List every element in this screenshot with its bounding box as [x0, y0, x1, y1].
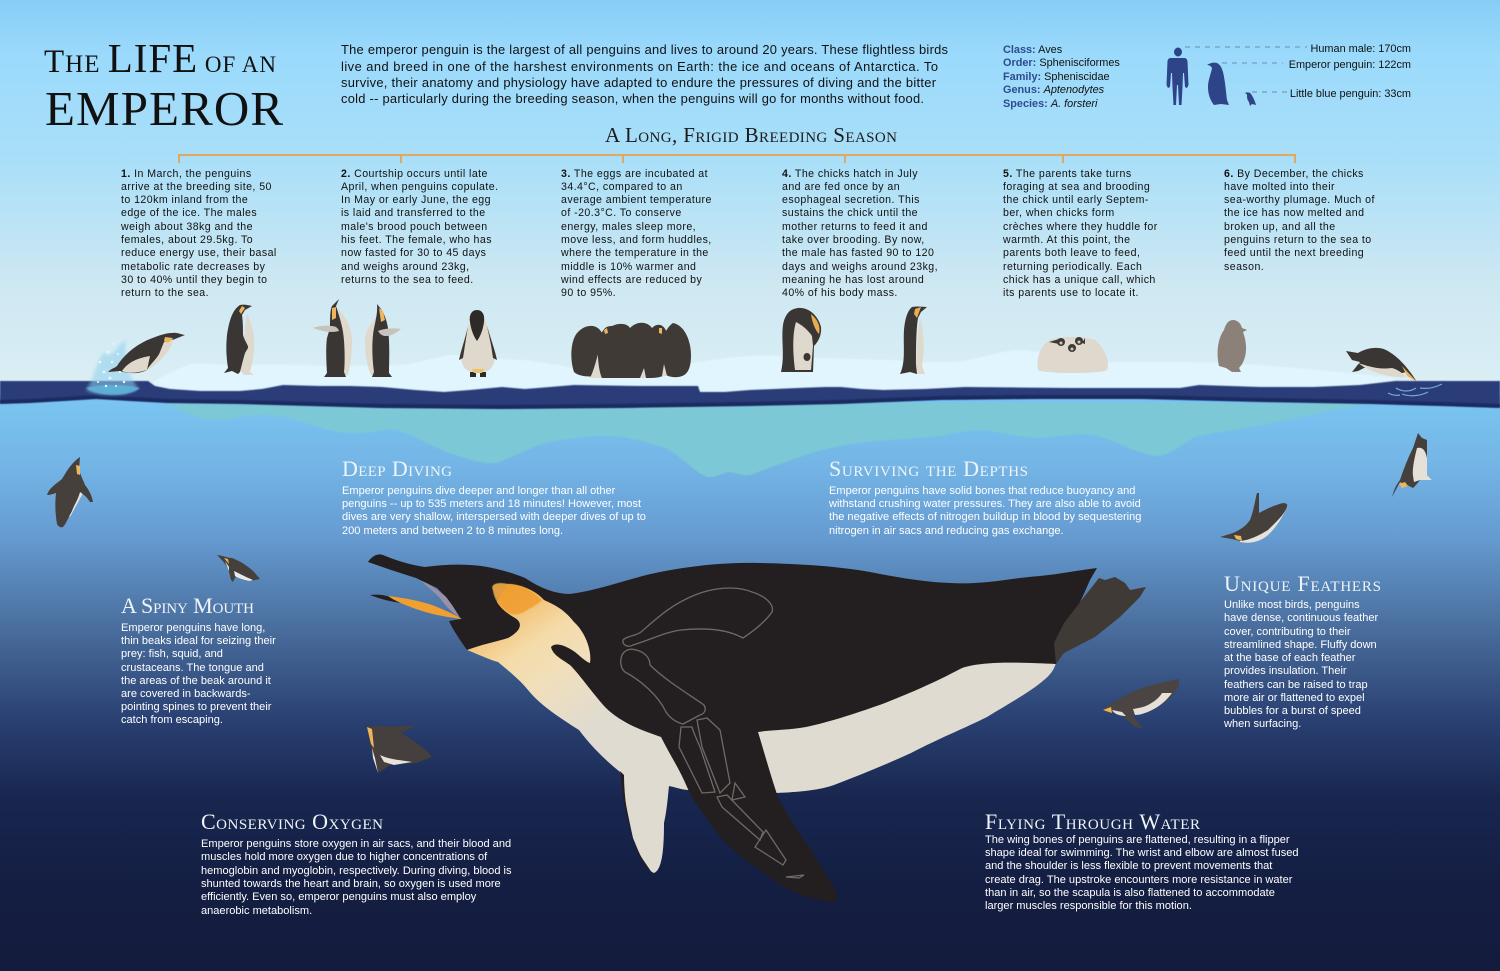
step 4: the male has fasted 90 to 120 [782, 247, 934, 259]
penguin huddle [571, 323, 691, 378]
text: flying through water: and the shoulder is less flexible to prevent movements that [985, 860, 1272, 872]
text: unique feathers: Unlike most birds, penguins [1224, 599, 1360, 611]
intro paragraph: survive, their anatomy and physiology have adapted to endure the pressures of diving and the bitter [341, 75, 937, 90]
text: surviving the depths: withstand crushing water pressures. They are also able to avoid [828, 498, 1141, 510]
step 5: crèches where they huddle for [1003, 221, 1158, 233]
step 1 [120, 168, 277, 299]
step 2: returns to the sea to feed. [341, 274, 474, 286]
intro paragraph: The emperor penguin is the largest of all penguins and lives to around 20 years. These flightless birds [341, 42, 948, 57]
step 4: mother returns to feed it and [782, 221, 928, 233]
text: unique feathers: bubbles for a burst of speed [1224, 705, 1361, 717]
step 6: broken up, and all the [1224, 221, 1336, 233]
step 6: sea-worthy plumage. Much of [1224, 194, 1375, 206]
step 1: return to the sea. [121, 287, 209, 299]
step 2: In May or early June, the egg [341, 194, 491, 206]
step 1: reduce energy use, their basal [121, 247, 277, 259]
step 1: 1. In March, the penguins [121, 168, 252, 180]
text: surviving the depths: nitrogen in air sacs and reducing gas exchange. [829, 525, 1064, 537]
text: conserving oxygen: muscles hold more oxygen due to higher concentrations of [201, 851, 488, 863]
text: deep diving: penguins -- up to 535 meters and 18 minutes! However, most [342, 498, 641, 510]
swimming penguin D [1103, 679, 1179, 728]
text: flying through water: larger muscles responsible for this motion. [985, 900, 1192, 912]
text: a spiny mouth: catch from escaping. [121, 714, 223, 726]
heading: unique feathers: Unique Feathers [1224, 571, 1381, 596]
text: surviving the depths: Emperor penguins have solid bones that reduce buoyancy and [829, 485, 1135, 497]
icon: human silhouette [1166, 48, 1188, 105]
text: unique feathers: streamlined shape. Fluffy down [1224, 639, 1377, 651]
text: conserving oxygen: shunted towards the heart and brain, so oxygen is used more [201, 878, 501, 890]
step 5: warmth. At this point, the [1002, 234, 1130, 246]
swimming penguin B [217, 555, 260, 582]
step 4: and are fed once by an [782, 181, 900, 193]
step 1: to 120km inland from the [121, 194, 248, 206]
text: deep diving [342, 485, 646, 537]
lower beak [370, 595, 462, 619]
step 4: 4. The chicks hatch in July [782, 168, 918, 180]
step 3 [560, 168, 712, 299]
text: unique feathers: have dense, continuous feather [1224, 612, 1378, 624]
step 6: the ice has now melted and [1224, 207, 1364, 219]
step 4: days and weighs around 23kg, [782, 261, 938, 273]
step 4: meaning he has lost around [782, 274, 924, 286]
penguins 3: courting pair [313, 299, 401, 377]
step 3: 90 to 95%. [561, 287, 616, 299]
text: flying through water: than in air, so the scapula is also flattened to accommodate [985, 887, 1275, 899]
text: a spiny mouth: Emperor penguins have long, [121, 622, 265, 634]
step 6: season. [1224, 261, 1264, 273]
step 1: 30 to 40% until they begin to [121, 274, 267, 286]
size comparison chart [1166, 43, 1411, 106]
text: unique feathers: when surfacing. [1223, 718, 1301, 730]
taxonomy list: Family: Spheniscidae [1003, 71, 1110, 83]
orange cheek patch [492, 583, 542, 614]
taxonomy list: Class: Aves [1003, 44, 1063, 56]
text: flying through water: shape ideal for swimming. The wrist and elbow are almost fused [985, 847, 1299, 859]
text: a spiny mouth: prey: fish, squid, and [121, 648, 223, 660]
text: conserving oxygen: efficiently. Even so, emperor penguins must also employ [201, 891, 477, 903]
step 5: chick has a unique call, which [1003, 274, 1156, 286]
tongue [421, 581, 460, 618]
background ocean [0, 395, 1500, 971]
step 1: weigh about 38kg and the [120, 221, 253, 233]
step 2 [341, 168, 498, 286]
step 3: energy, males sleep more, [561, 221, 696, 233]
text: a spiny mouth: thin beaks ideal for seizing their [121, 635, 276, 647]
text: conserving oxygen: Emperor penguins store oxygen in air sacs, and their blood and [201, 838, 511, 850]
step 2: now fasted for 30 to 45 days [341, 247, 486, 259]
step 3: wind effects are reduced by [560, 274, 703, 286]
text: flying through water [985, 834, 1299, 912]
penguin 6: male standing [900, 307, 927, 374]
step 1: arrive at the breeding site, 50 [121, 181, 272, 193]
text: surviving the depths: the negative effects of nitrogen buildup in blood by sequestering [829, 511, 1141, 523]
title [44, 35, 283, 136]
penguin 2: standing in profile [224, 305, 254, 375]
swimming penguin F [1392, 433, 1432, 497]
heading: flying through water: Flying Through Water [985, 809, 1200, 834]
step 3: 3. The eggs are incubated at [561, 168, 708, 180]
text: flying through water: The wing bones of penguins are flattened, resulting in a flipper [985, 834, 1290, 846]
text: unique feathers: cover, contributing to their [1224, 626, 1351, 638]
size labels: Human male: 170cm [1311, 43, 1411, 55]
penguin 8: diving into the water [1346, 348, 1417, 382]
cream chest and belly [467, 580, 1056, 873]
penguin 4: front view [459, 310, 497, 377]
swimming penguin E [1220, 493, 1288, 543]
step 4: take over brooding. By now, [782, 234, 925, 246]
main diving penguin [368, 554, 1146, 902]
intro paragraph: cold -- particularly during the breeding season, when the penguins will go for months without food. [341, 91, 924, 106]
title: EMPEROR [45, 81, 283, 136]
text: a spiny mouth: pointing spines to prevent their [121, 701, 272, 713]
icon: little blue penguin silhouette [1245, 92, 1256, 106]
step 2: 2. Courtship occurs until late [341, 168, 488, 180]
step 5: foraging at sea and brooding [1003, 181, 1150, 193]
size labels: Little blue penguin: 33cm [1290, 88, 1411, 100]
text: unique feathers: at the base of each feather [1224, 652, 1356, 664]
heading: conserving oxygen: Conserving Oxygen [201, 809, 383, 834]
intro paragraph [341, 42, 948, 106]
step 3: where the temperature in the [560, 247, 709, 259]
step 5: returning periodically. Each [1003, 261, 1142, 273]
snow covered ice shelf [150, 350, 1395, 392]
step 3: middle is 10% warmer and [561, 261, 696, 273]
wing skeleton [621, 588, 804, 878]
step 1: females, about 29.5kg. To [121, 234, 253, 246]
text: a spiny mouth: the areas of the beak around it [121, 675, 271, 687]
chicks huddled [1038, 337, 1108, 373]
water ripples [1388, 384, 1442, 396]
step 5 [1002, 168, 1158, 299]
step 2: and weighs around 23kg, [341, 261, 470, 273]
step 1: metabolic rate decreases by [121, 261, 266, 273]
text: conserving oxygen: hemoglobin and myoglobin, respectively. During diving, blood is [201, 865, 512, 877]
splash at ice edge [86, 340, 140, 395]
water surface band [0, 381, 1500, 408]
text: unique feathers: feathers can be raised to trap [1224, 679, 1368, 691]
step 5: the chick until early Septem- [1003, 194, 1149, 206]
step 6 [1224, 168, 1375, 273]
text: a spiny mouth [121, 622, 276, 726]
penguin 5: adult feeding chick [781, 308, 821, 372]
title: THE LIFE OF AN [44, 35, 276, 81]
text: unique feathers: provides insulation. Their [1224, 665, 1347, 677]
dark tail feathers [1054, 577, 1146, 664]
taxonomy list [1003, 44, 1120, 110]
step 5: ber, when chicks form [1003, 207, 1115, 219]
heading: deep diving: Deep Diving [342, 456, 452, 481]
intro paragraph: live and breed in one of the harshest environments on Earth: the ice and oceans of Antarctica. To [341, 59, 938, 74]
step 4: esophageal secretion. This [782, 194, 920, 206]
text: surviving the depths [828, 485, 1141, 537]
step 5: its parents use to locate it. [1003, 287, 1139, 299]
text: a spiny mouth: are covered in backwards- [121, 688, 251, 700]
heading: surviving the depths: Surviving the Depths [829, 456, 1028, 481]
text: deep diving: 200 meters and between 2 to 8 minutes long. [342, 525, 563, 537]
step 2: his feet. The female, who has [341, 234, 492, 246]
step 6: feed until the next breeding [1224, 247, 1364, 259]
breeding season heading: A Long, Frigid Breeding Season [605, 123, 897, 147]
step 4 [782, 168, 938, 299]
icon: emperor penguin silhouette [1207, 63, 1229, 105]
black body [368, 554, 1097, 902]
dashed leader lines [1185, 47, 1307, 92]
step 5: 5. The parents take turns [1003, 168, 1132, 180]
dark water line [0, 395, 1500, 409]
text: unique feathers: more air or flattened to expel [1224, 692, 1365, 704]
step 2: male's brood pouch between [341, 221, 488, 233]
step 5: parents both leave to feed, [1003, 247, 1140, 259]
step 1: edge of the ice. The males [121, 207, 257, 219]
size labels [1289, 43, 1411, 100]
step 6: have molted into their [1224, 181, 1335, 193]
swimming penguin C [367, 725, 432, 773]
background sky [0, 0, 1500, 400]
size labels: Emperor penguin: 122cm [1289, 59, 1411, 71]
text: flying through water: create drag. The upstroke encounters more resistance in water [985, 874, 1293, 886]
step 2: April, when penguins copulate. [341, 181, 498, 193]
text: a spiny mouth: crustaceans. The tongue and [121, 662, 264, 674]
timeline bracket [179, 155, 1295, 163]
text: unique feathers [1223, 599, 1378, 730]
taxonomy list: Species: A. forsteri [1003, 98, 1098, 110]
heading: a spiny mouth: A Spiny Mouth [121, 593, 254, 618]
text: deep diving: Emperor penguins dive deeper and longer than all other [342, 485, 616, 497]
taxonomy list: Genus: Aptenodytes [1003, 84, 1105, 96]
step 4: 40% of his body mass. [782, 287, 898, 299]
step 4: sustains the chick until the [782, 207, 918, 219]
step 2: is laid and transferred to the [341, 207, 486, 219]
step 3: move less, and form huddles, [561, 234, 712, 246]
swimming penguin A: upper left [47, 457, 93, 527]
step 6: 6. By December, the chicks [1224, 168, 1364, 180]
step 6: penguins return to the sea to [1224, 234, 1372, 246]
text: conserving oxygen: anaerobic metabolism. [201, 905, 312, 917]
step 3: 34.4°C, compared to an [561, 181, 683, 193]
penguin 1: leaping out of the water [108, 333, 185, 373]
underwater iceberg [167, 402, 1371, 477]
text: conserving oxygen [201, 838, 512, 917]
step 3: average ambient temperature [561, 194, 712, 206]
taxonomy list: Order: Sphenisciformes [1003, 57, 1120, 69]
foot dark edge [620, 771, 652, 873]
step 3: of -20.3°C. To conserve [561, 207, 682, 219]
text: deep diving: dives are very shallow, interspersed with deeper dives of up to [342, 511, 646, 523]
penguin 7: molting chick [1218, 320, 1247, 372]
